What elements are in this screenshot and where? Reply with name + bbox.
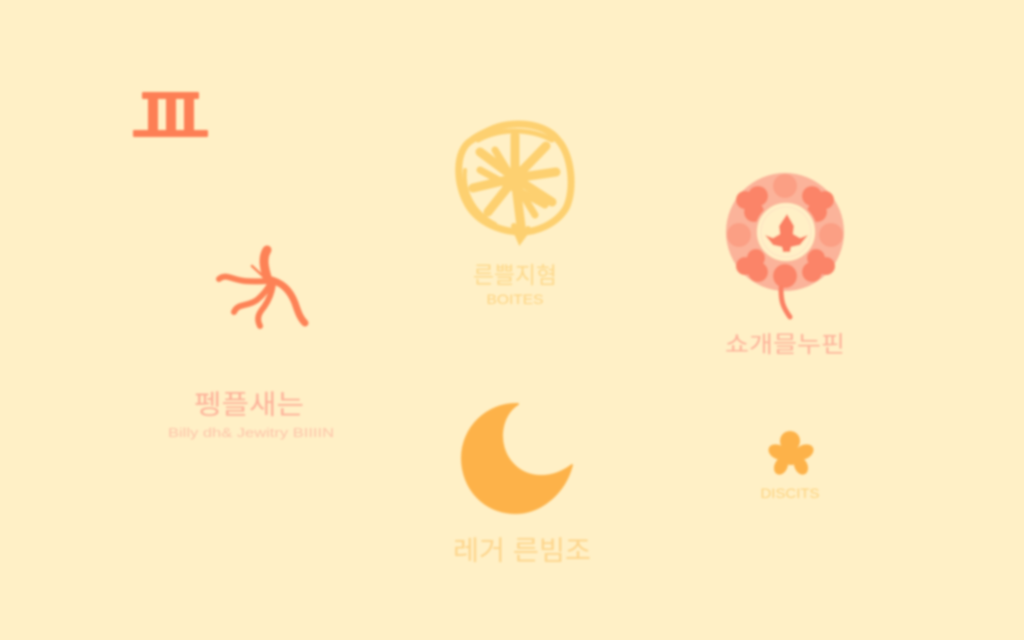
icon: crescent moon — [462, 404, 572, 513]
icon: citrus slice — [459, 124, 571, 240]
icon: ginseng root — [219, 250, 305, 326]
text: right Korean heading: 쇼개믈누핀 — [725, 331, 845, 357]
text: blossom label: DISCITS — [760, 485, 820, 501]
icon: flower wreath — [726, 173, 844, 317]
text: center top subtitle: BOITES — [486, 291, 544, 307]
text: center top Korean heading: 른쁠지혐 — [473, 262, 557, 288]
maple leaf — [765, 214, 808, 252]
inner ring — [756, 202, 816, 262]
icon: five-petal blossom — [766, 431, 816, 477]
text: center top label — [473, 262, 557, 307]
text: moon Korean heading: 레거 른빔조 — [453, 536, 591, 566]
text: left label — [168, 390, 334, 440]
text: left Korean heading: 펭플새는 — [194, 390, 304, 420]
wreath flowers — [736, 186, 835, 288]
text: left subtitle: Billy dh& Jewitry BIIIIN — [168, 425, 334, 440]
wreath ring — [726, 173, 844, 291]
icon: roman numeral three — [133, 92, 208, 137]
stem — [781, 288, 790, 317]
